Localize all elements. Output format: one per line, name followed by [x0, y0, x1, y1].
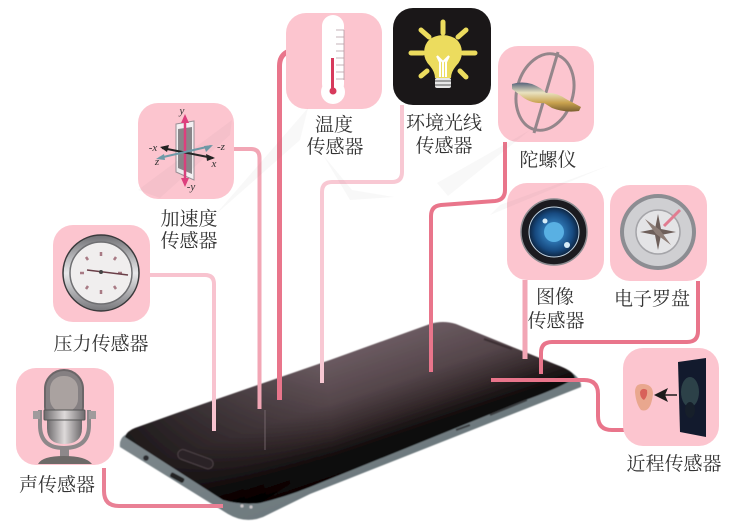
icon: arrow [654, 388, 677, 402]
tile [138, 103, 234, 199]
tile [507, 183, 604, 280]
panel: sound sensor [16, 368, 114, 496]
label [306, 114, 364, 158]
tile [53, 225, 150, 322]
icon: microphone [33, 370, 96, 464]
icon: gyroscope [507, 47, 583, 137]
tile [610, 185, 707, 281]
icon: camera lens [521, 199, 587, 265]
icon: thermometer [321, 15, 345, 104]
label: 环境光线 [406, 112, 482, 134]
label [160, 208, 218, 252]
label: 图像 [536, 286, 574, 308]
tile [286, 13, 382, 109]
icon: axes: z [154, 156, 160, 168]
connector: compass [541, 281, 698, 374]
label: 传感器 [527, 309, 585, 332]
panel: temperature sensor [286, 13, 382, 158]
label: 电子罗盘 [614, 288, 690, 310]
icon: axes [149, 105, 226, 193]
connector: sound sensor [104, 468, 223, 506]
connector: temperature sensor [280, 52, 287, 400]
headphone jack [143, 455, 149, 461]
background watermark [138, 108, 610, 215]
panel: acceleration sensor [138, 103, 234, 252]
connector: acceleration sensor [234, 149, 260, 409]
icon: phone [678, 358, 706, 437]
smartphone [120, 322, 581, 520]
label: 加速度 [160, 208, 218, 230]
home button [176, 448, 215, 470]
icon: axes: x [211, 158, 217, 170]
icon: light bulb [411, 22, 475, 88]
label [406, 112, 482, 157]
label: 压力传感器 [53, 332, 149, 355]
connector: gyroscope [431, 142, 505, 372]
label: 近程传感器 [626, 452, 722, 475]
tile [498, 46, 594, 142]
usb port [169, 472, 185, 483]
connector: proximity sensor [491, 380, 624, 430]
label: 声传感器 [19, 473, 95, 496]
icon: axes: -x [149, 142, 157, 154]
earpiece [484, 339, 512, 349]
icon: axes: y [179, 105, 185, 117]
icon: pressure gauge [63, 235, 139, 311]
label: 温度 [315, 114, 353, 136]
icon: compass [620, 194, 696, 270]
tile [16, 368, 114, 465]
icon: ear [635, 384, 653, 410]
side buttons [456, 400, 527, 430]
icon: axes: -z [217, 141, 226, 153]
label: 陀螺仪 [519, 149, 577, 171]
speaker dots [240, 504, 253, 509]
label [527, 286, 585, 332]
panel: proximity sensor [623, 348, 722, 475]
connector: ambient light sensor [322, 105, 402, 383]
icon: axes: -y [187, 181, 195, 193]
screen shading [125, 360, 330, 504]
tile [623, 348, 719, 446]
panel: compass [610, 185, 707, 310]
connector: pressure sensor [150, 275, 214, 431]
panel: gyroscope [498, 46, 594, 171]
panel: image sensor [507, 183, 604, 332]
label: 传感器 [306, 135, 364, 158]
connector: image sensor [522, 280, 528, 359]
label: 传感器 [160, 229, 218, 252]
phone body [120, 326, 581, 520]
panel: ambient light sensor [393, 8, 491, 157]
phone screen [125, 322, 575, 504]
label: 传感器 [415, 134, 473, 157]
tile [393, 8, 491, 105]
panel: pressure sensor [53, 225, 150, 355]
